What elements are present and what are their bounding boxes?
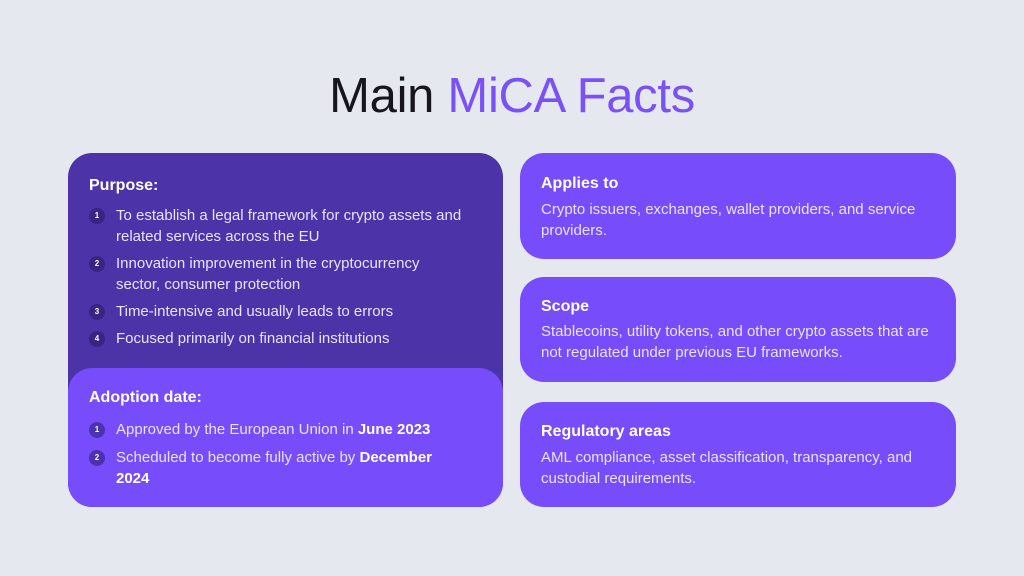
item 4: Focused primarily on financial institutions bbox=[116, 330, 389, 347]
item 3: 3 bbox=[95, 307, 99, 316]
heading: Applies to bbox=[541, 175, 618, 192]
adoption item 1: Approved by the European Union in June 2023 bbox=[116, 421, 430, 438]
title: Main MiCA Facts bbox=[329, 69, 695, 123]
card: regulatory areas bbox=[520, 402, 956, 507]
adoption item 2: Scheduled to become fully active by December 2024 bbox=[116, 449, 432, 487]
heading: Scope bbox=[541, 298, 589, 315]
text: AML compliance, asset classification, transparency, and custodial requirements. bbox=[541, 449, 912, 487]
card: applies to bbox=[520, 153, 956, 259]
item 1: 1 bbox=[95, 211, 99, 220]
item 2: Innovation improvement in the cryptocurrency sector, consumer protection bbox=[116, 255, 419, 293]
item 1: To establish a legal framework for crypto assets and related services across the EU bbox=[116, 207, 461, 245]
text: Crypto issuers, exchanges, wallet providers, and service providers. bbox=[541, 201, 915, 239]
item 3: Time-intensive and usually leads to errors bbox=[116, 303, 393, 320]
text: Stablecoins, utility tokens, and other crypto assets that are not regulated under previous EU frameworks. bbox=[541, 323, 929, 361]
item 4: 4 bbox=[95, 334, 99, 343]
item 2: 2 bbox=[95, 259, 99, 268]
card: scope bbox=[520, 277, 956, 382]
heading: adoption date: Adoption date: bbox=[89, 389, 202, 406]
adoption item 2: 2 bbox=[95, 453, 99, 462]
panel: adoption date bbox=[68, 368, 503, 507]
heading: Regulatory areas bbox=[541, 423, 671, 440]
heading: purpose: Purpose: bbox=[89, 177, 158, 194]
adoption item 1: 1 bbox=[95, 425, 99, 434]
panel: purpose bbox=[68, 153, 503, 507]
